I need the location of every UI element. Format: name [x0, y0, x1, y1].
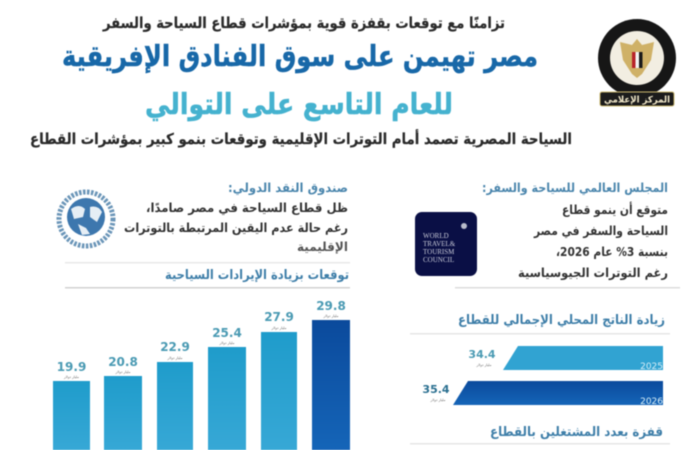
- subtitle: للعام التاسع على التوالي: [145, 87, 453, 121]
- IMF body text: [124, 200, 348, 254]
- bar 29.8: مليار دولار: [323, 314, 339, 318]
- bar 2026: [422, 381, 663, 407]
- chart heading: توقعات بزيادة الإيرادات السياحية: [165, 268, 349, 283]
- bar 2025: 2025: [640, 362, 663, 372]
- icon: WTTC logo: TOURISM: [423, 248, 455, 256]
- bar 2025: 34.4: [468, 348, 496, 361]
- bar 25.4: 25.4: [212, 326, 242, 340]
- bar 2026: 35.4: [422, 383, 450, 396]
- bar 20.8: [104, 355, 142, 450]
- bar 19.9: مليار دولار: [63, 375, 79, 379]
- GDP heading: زيادة الناتج المحلي الإجمالي للقطاع: [458, 313, 665, 328]
- icon: WTTC logo: [415, 212, 477, 276]
- bar 20.8: 20.8: [108, 355, 138, 369]
- icon: WTTC logo: COUNCIL: [423, 256, 454, 264]
- IMF body text: ظل قطاع السياحة في مصر صامدًا،: [146, 200, 348, 215]
- IMF body text: الإقليمية: [297, 239, 348, 254]
- panel: IMF: [59, 180, 348, 254]
- summary line: السياحة المصرية تصمد أمام التوترات الإقليمية وتوقعات بنمو كبير بمؤشرات القطاع: [30, 129, 572, 148]
- bar 22.9: 22.9: [160, 340, 190, 354]
- bar 2025: [468, 346, 663, 372]
- icon: ministry emblem: المركز الإعلامي: [604, 96, 670, 106]
- kicker text: تزامنًا مع توقعات بقفزة قوية بمؤشرات قطاع السياحة والسفر: [102, 14, 505, 32]
- bar 19.9: [53, 360, 90, 450]
- bar 25.4: مليار دولار: [219, 341, 235, 345]
- bar 22.9: [157, 340, 193, 450]
- WTTC body text: بنسبة 3% عام 2026،: [556, 244, 668, 260]
- bar 27.9: مليار دولار: [271, 326, 287, 330]
- bar 25.4: [208, 326, 246, 450]
- WTTC heading: المجلس العالمي للسياحة والسفر:: [482, 180, 668, 195]
- panel: WTTC: [415, 180, 680, 288]
- panel: GDP growth: [410, 313, 670, 407]
- bar 29.8: 29.8: [316, 299, 346, 313]
- IMF heading: صندوق النقد الدولي:: [228, 180, 348, 195]
- title: مصر تهيمن على سوق الفنادق الإفريقية: [62, 39, 538, 73]
- WTTC body text: السياحة والسفر في مصر: [533, 223, 668, 238]
- bar chart: [53, 299, 350, 450]
- WTTC body text: رغم التوترات الجيوسياسية: [518, 265, 668, 280]
- bar 2026: مليار دولار: [430, 398, 446, 402]
- bar 27.9: 27.9: [264, 310, 294, 324]
- icon: ministry emblem: [598, 19, 676, 106]
- WTTC body text: [518, 201, 668, 280]
- bar 27.9: [261, 310, 297, 450]
- bar 20.8: مليار دولار: [115, 370, 131, 374]
- panel: employment heading: قفزة بعدد المشتغلين بالقطاع: [490, 425, 663, 440]
- WTTC body text: متوقع أن ينمو قطاع: [562, 201, 668, 217]
- bar 19.9: 19.9: [57, 360, 86, 374]
- bar 29.8: [312, 299, 350, 450]
- icon: IMF seal: [59, 192, 113, 246]
- IMF body text: رغم حالة عدم اليقين المرتبطة بالتوترات: [124, 220, 348, 236]
- icon: WTTC logo: TRAVEL&: [423, 240, 456, 248]
- panel: revenue forecast chart: [53, 262, 350, 450]
- icon: WTTC logo: WORLD: [423, 232, 449, 240]
- bar 22.9: مليار دولار: [167, 356, 183, 360]
- bar 2025: مليار دولار: [476, 363, 492, 367]
- bar 2026: 2026: [640, 397, 663, 407]
